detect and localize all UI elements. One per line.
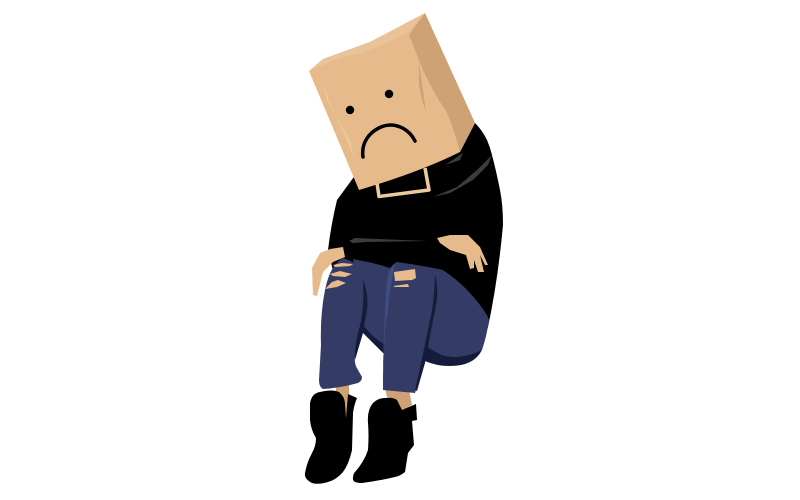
right leg shadow	[415, 275, 437, 391]
jeans seat and thigh	[353, 259, 489, 357]
shirt	[328, 123, 503, 345]
left leg of jeans	[319, 258, 364, 389]
left leg shadow	[355, 280, 368, 360]
bag front	[309, 13, 475, 190]
collar fold	[433, 153, 492, 197]
bag creases	[322, 80, 354, 158]
knee tears	[325, 263, 416, 289]
right leg highlight	[383, 263, 395, 373]
right boot	[353, 398, 417, 483]
left hand	[312, 247, 345, 296]
bag side	[409, 13, 475, 152]
sad mouth	[363, 125, 415, 157]
bag strap	[377, 168, 429, 196]
ankles	[336, 385, 412, 417]
right hand	[437, 235, 488, 272]
right eye	[385, 90, 393, 98]
jeans underside shadow	[363, 325, 482, 366]
left boot	[305, 390, 357, 484]
left eye	[346, 106, 354, 114]
right leg of jeans	[383, 262, 436, 393]
paper bag	[309, 13, 475, 190]
bag top fold	[309, 13, 425, 71]
sleeve fold	[349, 238, 428, 243]
